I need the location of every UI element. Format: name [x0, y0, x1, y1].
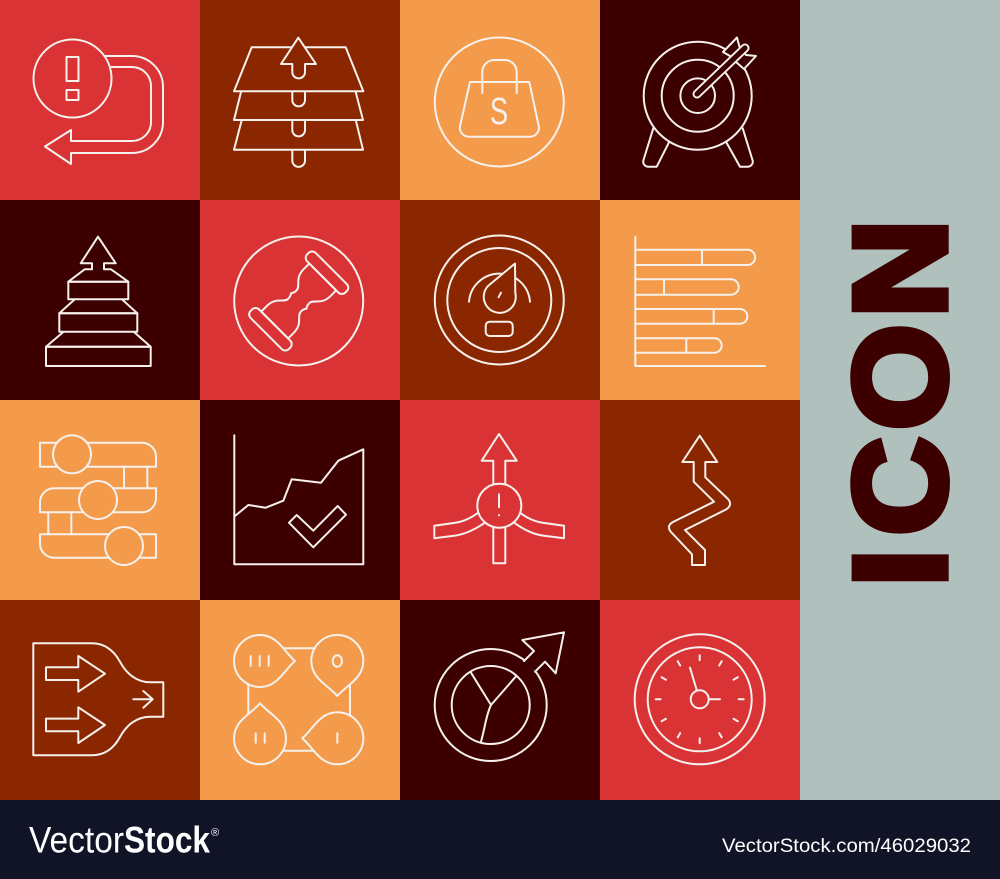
panel: gauge: [400, 200, 600, 400]
icon: target with arrow: [643, 38, 756, 167]
icon: stacked layers with up arrow: [234, 38, 363, 167]
icon: warning return arrow: [34, 40, 163, 164]
chart: area chart with check mark: [234, 435, 363, 564]
panel: target: [600, 0, 800, 200]
panel: funnel arrows: [0, 600, 200, 800]
footer registered mark: ®: [211, 827, 219, 839]
panel: bar chart: [600, 200, 800, 400]
icon: four drop cycle: [234, 635, 363, 764]
icon: speed gauge: [435, 236, 564, 364]
icon: junction with warning: [434, 434, 564, 563]
chart: horizontal stacked bars: [635, 237, 765, 366]
icon: bottle funnel with arrows: [33, 643, 163, 755]
panel: warning return arrow: [0, 0, 200, 200]
icon: winding road arrow: [669, 436, 730, 565]
footer logo: VectorStock: VectorStock: [29, 820, 210, 861]
icon: wall clock: [635, 634, 765, 764]
panel: hourglass: [200, 200, 400, 400]
panel: shopping bag: [400, 0, 600, 200]
footer bar: [0, 800, 1000, 879]
panel: process cycle: [200, 600, 400, 800]
icon: pie chart with arrow: [435, 632, 564, 761]
panel: side title band: [800, 0, 1000, 800]
panel: merging roads: [400, 400, 600, 600]
panel: sliders: [0, 400, 200, 600]
panel: winding arrow: [600, 400, 800, 600]
icon: connected sliders: [40, 435, 156, 565]
panel: pyramid: [0, 200, 200, 400]
icon: shopping bag in circle: [435, 38, 564, 166]
panel: area chart: [200, 400, 400, 600]
panel: layers with arrow: [200, 0, 400, 200]
panel: clock: [600, 600, 800, 800]
footer image id: VectorStock.com/46029032: [722, 835, 971, 857]
icon: shopping bag in circle: S: [490, 91, 508, 133]
icon: stepped pyramid with arrow: [46, 237, 151, 366]
heading: ICON: ICON: [828, 219, 974, 587]
icon: hourglass in circle: [234, 236, 363, 366]
panel: pie chart arrow: [400, 600, 600, 800]
